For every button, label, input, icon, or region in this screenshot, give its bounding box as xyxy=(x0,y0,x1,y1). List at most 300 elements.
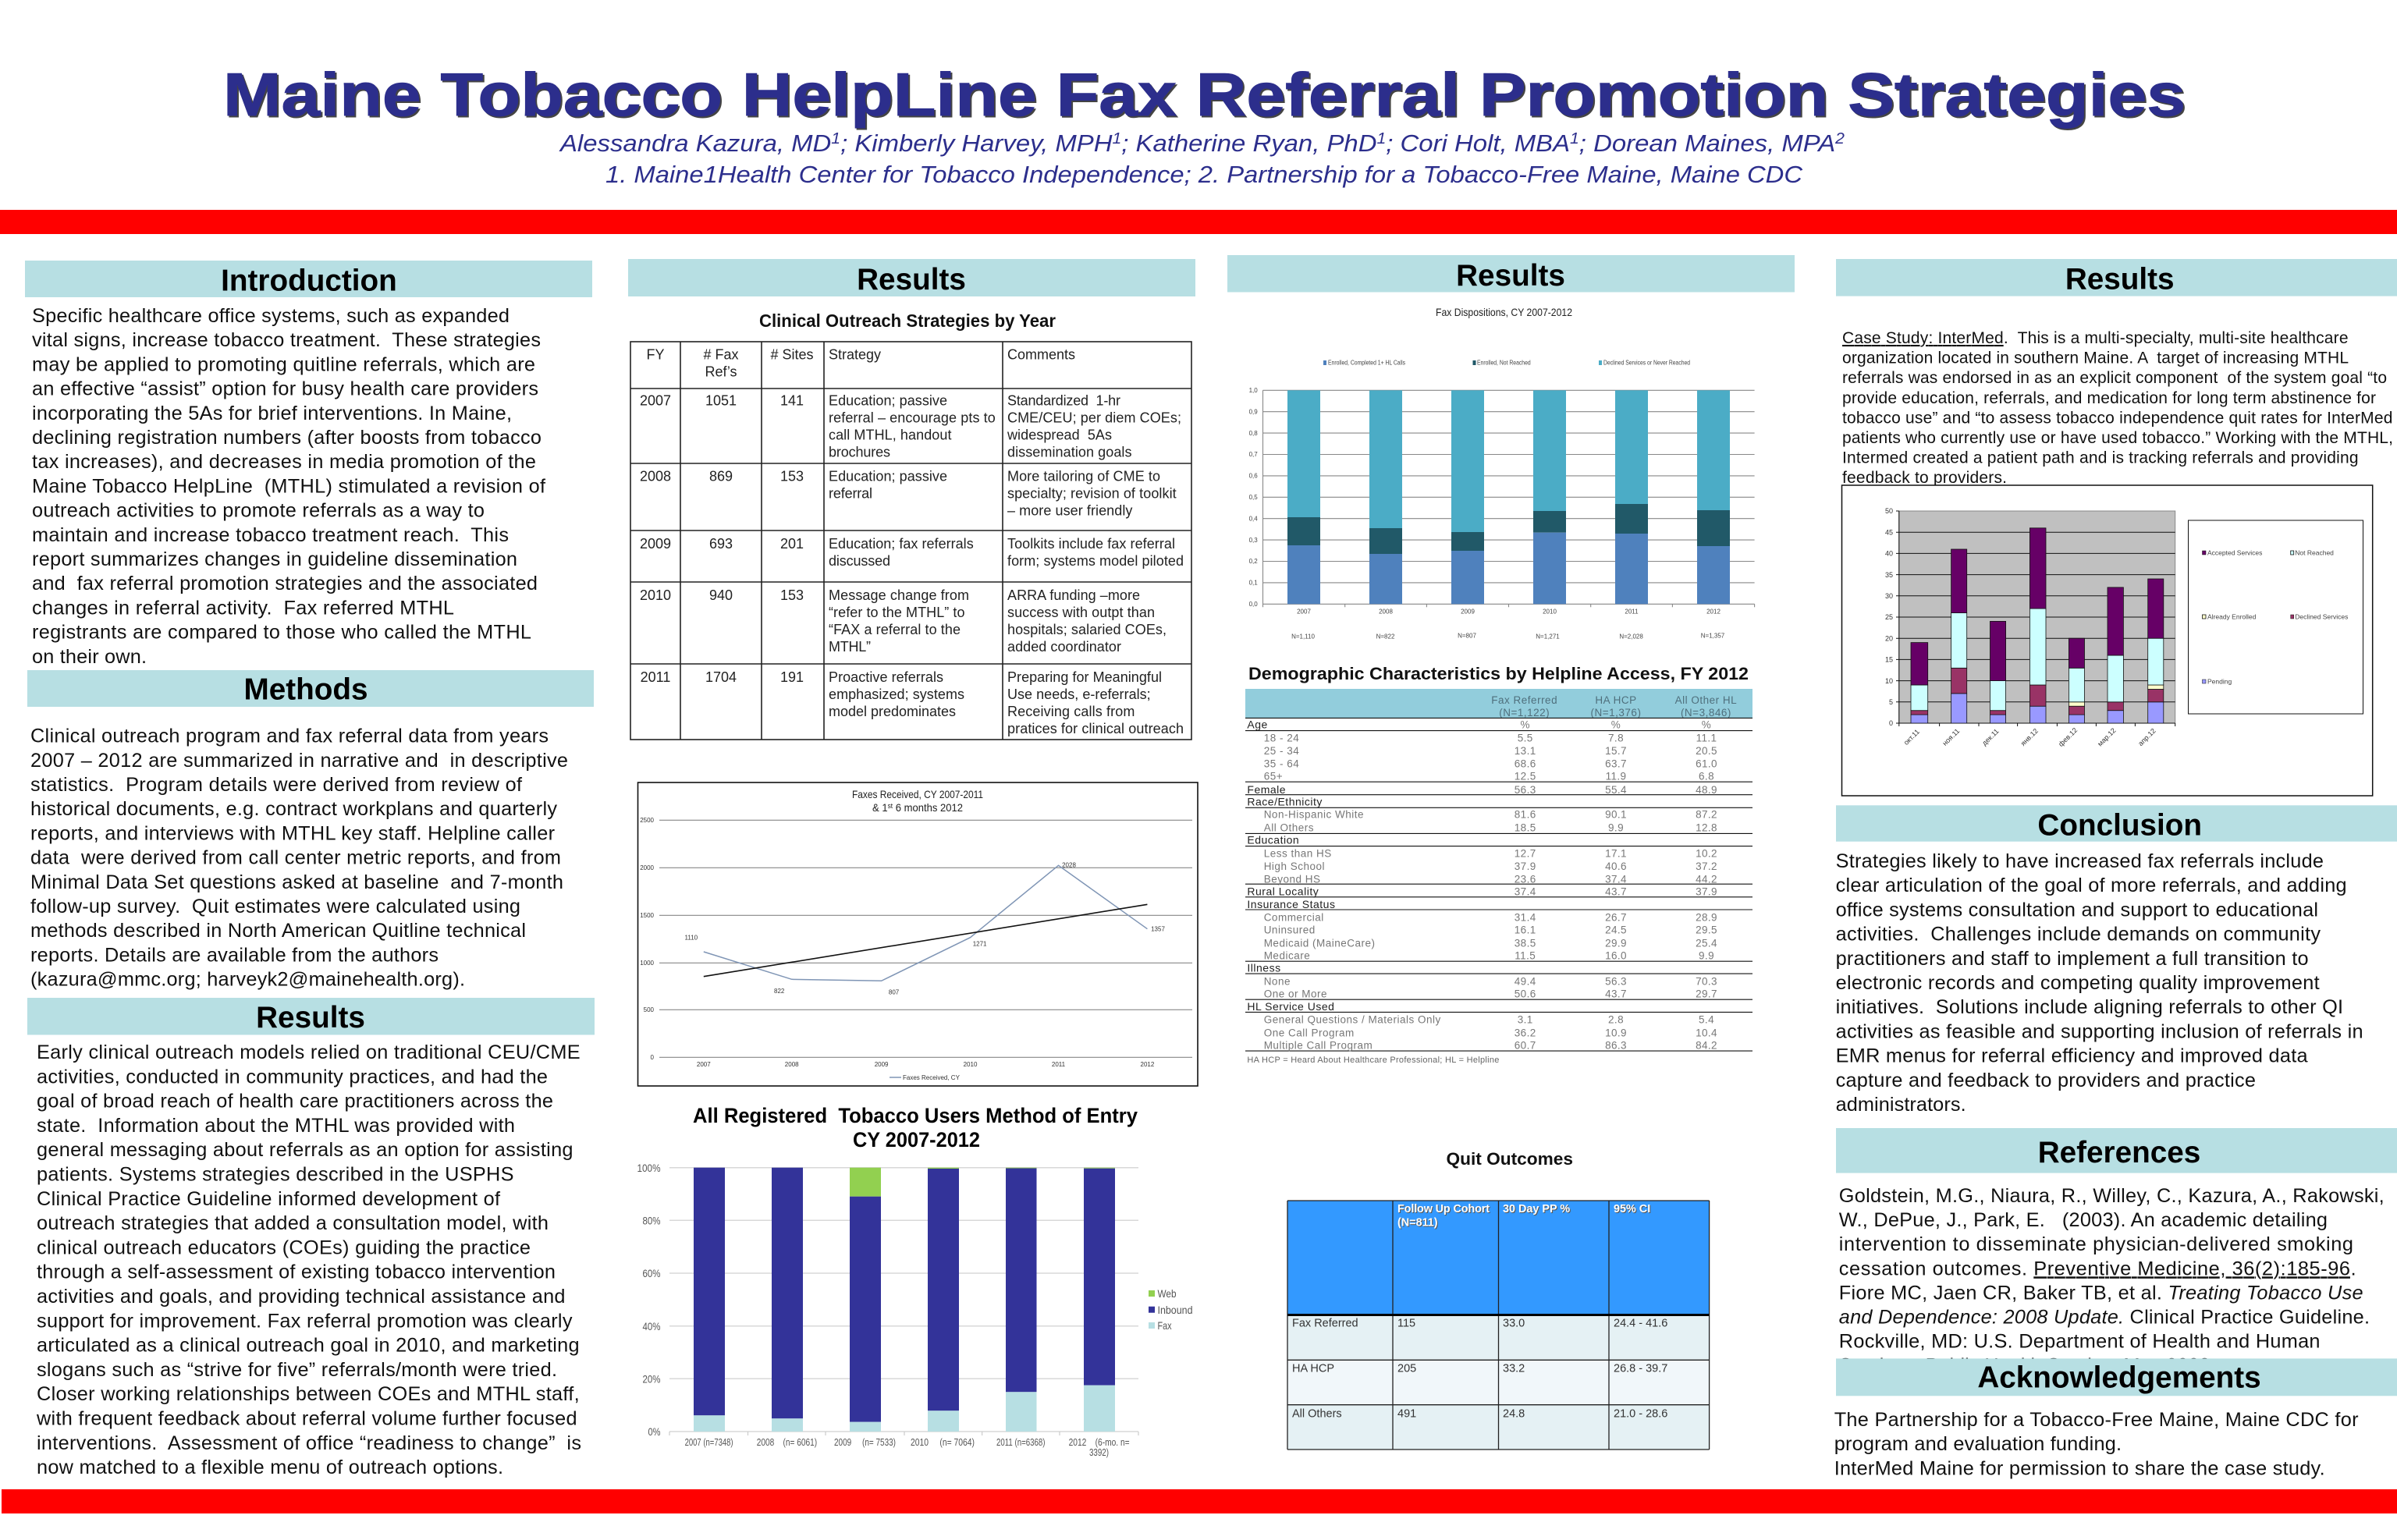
table text: 2008 xyxy=(640,469,671,484)
table values: 37.2 xyxy=(1696,860,1717,872)
heading: results column 1: Results xyxy=(256,1001,365,1034)
table text: 153 xyxy=(780,469,804,484)
authors and affiliations: 1 xyxy=(1376,130,1386,147)
heading: results column 2: Results xyxy=(857,263,966,296)
heading: references xyxy=(1836,1128,2397,1173)
axis labels: 0,5 xyxy=(1249,494,1258,501)
row labels: sub-categories: Non-Hispanic White xyxy=(1264,809,1364,821)
axis labels: 2009 xyxy=(1461,609,1475,615)
table text: More tailoring of CME to xyxy=(1007,469,1160,484)
heading: introduction: Introduction xyxy=(221,264,397,298)
table text: Strategy xyxy=(829,346,881,362)
text: results body: support for improvement. Fax referral promotion was clearly xyxy=(37,1310,573,1332)
table footnote: HA HCP = Heard About Healthcare Professional; HL = Helpline xyxy=(1247,1056,1499,1065)
axis labels xyxy=(1249,387,1725,640)
text: introduction body: on their own. xyxy=(32,646,147,668)
text: conclusion body: clear articulation of the goal of more referrals, and adding xyxy=(1836,875,2347,896)
table header text: Follow Up Cohort xyxy=(1397,1203,1490,1215)
table text: Ref’s xyxy=(705,364,737,379)
data labels: 2028 xyxy=(1062,861,1076,869)
table values: 11.1 xyxy=(1696,733,1717,744)
stacked bar chart: InterMed referrals xyxy=(1841,485,2373,796)
text: introduction body: an effective “assist” option for busy health care providers xyxy=(32,378,538,400)
table values: 9.9 xyxy=(1608,821,1624,833)
y axis labels: 0 xyxy=(651,1054,655,1061)
table values: 16.0 xyxy=(1605,950,1627,962)
table values: 43.7 xyxy=(1605,886,1627,897)
authors and affiliations: Alessandra Kazura, MD xyxy=(560,130,815,157)
text: introduction body: registrants are compared to those who called the MTHL xyxy=(32,622,531,644)
x axis labels: 2010 (n= 7064) xyxy=(911,1437,975,1448)
heading: results column 3: Results xyxy=(1456,259,1565,293)
table row text: 33.2 xyxy=(1503,1363,1525,1375)
row labels: categories: Female xyxy=(1247,783,1286,796)
table values: 18.5 xyxy=(1515,821,1536,833)
row labels: sub-categories: Less than HS xyxy=(1264,848,1332,860)
text: introduction body: changes in referral activity. Fax referred MTHL xyxy=(32,597,454,619)
legend xyxy=(1149,1287,1192,1332)
text: case study InterMed: feedback to providers. xyxy=(1842,469,2007,487)
heading: results column 4 xyxy=(1836,259,2397,296)
text: acknowledgements body xyxy=(1834,1409,2358,1480)
panel: methods xyxy=(27,670,594,991)
panel: acknowledgements xyxy=(1834,1358,2397,1480)
y axis labels: 500 xyxy=(644,1006,655,1013)
text: results body: state. Information about the MTHL was provided with xyxy=(37,1115,515,1137)
row labels: sub-categories: High School xyxy=(1264,860,1325,872)
table values: 68.6 xyxy=(1515,758,1536,769)
fax line series xyxy=(704,865,1147,981)
y axis labels: 40% xyxy=(643,1320,660,1332)
axis labels: 2008 xyxy=(1379,609,1393,615)
stacked bar chart: fax dispositions xyxy=(1249,306,1755,640)
data labels: 1357 xyxy=(1151,925,1165,933)
table text: Toolkits include fax referral xyxy=(1007,536,1175,552)
table values: 43.7 xyxy=(1605,988,1627,999)
text: case study InterMed: Case Study: InterMed. This is a multi-specialty, multi-site healthcare xyxy=(1842,329,2349,347)
table values: 16.1 xyxy=(1515,924,1536,936)
table text: Use needs, e-referrals; xyxy=(1007,687,1151,702)
axis labels: 2011 xyxy=(1625,609,1639,615)
text: methods body: methods described in North American Quitline technical xyxy=(30,920,526,942)
table values: 50.6 xyxy=(1515,988,1536,999)
text: case study InterMed: referrals was endorsed in as an explicit component of the system goal “to xyxy=(1842,369,2387,387)
text: results body: with frequent feedback about referral volume further focused xyxy=(36,1407,577,1429)
table row text: 21.0 - 28.6 xyxy=(1614,1408,1667,1421)
text: introduction body: declining registration numbers (after boosts from tobacco xyxy=(32,427,542,449)
legend: Inbound xyxy=(1158,1304,1192,1316)
text: references body: Rockville, MD: U.S. Department of Health and Human xyxy=(1839,1331,2321,1353)
text: acknowledgements body: InterMed Maine for permission to share the case study. xyxy=(1834,1458,2325,1480)
table row text xyxy=(1292,1318,1667,1421)
table title: Quit Outcomes xyxy=(1447,1149,1573,1169)
text: methods body: follow-up survey. Quit estimates were calculated using xyxy=(30,896,520,917)
authors and affiliations: 1. Maine1Health Center for Tobacco Independence; 2. Partnership for a Tobacco-Free Maine, Maine CDC xyxy=(605,161,1803,188)
text: results body: activities, conducted in community practices, and had the xyxy=(37,1066,548,1088)
text: case study InterMed: organization located in southern Maine. A target of increasing MTHL xyxy=(1842,350,2349,367)
table values: 24.5 xyxy=(1605,924,1627,936)
data labels: 1271 xyxy=(973,941,987,947)
text: acknowledgements body: program and evaluation funding. xyxy=(1834,1433,2122,1455)
table text: 693 xyxy=(709,536,733,552)
row labels: categories: Education xyxy=(1247,834,1299,846)
y axis labels: 15 xyxy=(1885,655,1893,663)
text: methods body: statistics. Program details were derived from review of xyxy=(30,774,523,796)
panel: clinical outreach strategies table xyxy=(630,310,1191,740)
text: references body: Fiore MC, Jaen CR, Baker TB, et al. Treating Tobacco Use xyxy=(1839,1282,2363,1304)
text: introduction body: maintain and increase tobacco treatment reach. This xyxy=(32,524,509,546)
table values: 17.1 xyxy=(1605,848,1627,860)
x axis labels xyxy=(1902,726,2157,748)
text: conclusion body xyxy=(1836,850,2363,1116)
table values: 23.6 xyxy=(1515,874,1536,885)
text: results body: now matched to a flexible menu of outreach options. xyxy=(37,1457,503,1478)
axis labels: 0,7 xyxy=(1249,451,1258,458)
table row text: HA HCP xyxy=(1292,1363,1334,1375)
y axis labels: 30 xyxy=(1885,592,1893,600)
table values: 63.7 xyxy=(1605,758,1627,769)
table text: Preparing for Meaningful xyxy=(1007,669,1162,685)
table text: Education; fax referrals xyxy=(829,536,974,552)
axis labels: 0,6 xyxy=(1249,473,1258,479)
heading: results column 4: Results xyxy=(2065,262,2175,296)
row labels: sub-categories: 18 - 24 xyxy=(1264,733,1299,744)
text: case study InterMed: Intermed created a patient path and is tracking referrals and providing xyxy=(1842,449,2358,467)
table text: # Fax xyxy=(703,346,739,362)
text: results body: through a self-assessment of existing tobacco intervention xyxy=(37,1261,556,1283)
panel: introduction xyxy=(25,261,592,668)
title: Maine Tobacco HelpLine Fax Referral Promotion Strategies xyxy=(223,60,2186,129)
y axis labels: 40 xyxy=(1885,549,1893,557)
table values: 48.9 xyxy=(1696,784,1717,796)
table values: 70.3 xyxy=(1696,975,1717,987)
table text: dissemination goals xyxy=(1007,445,1131,460)
x axis labels xyxy=(685,1437,1130,1458)
text: conclusion body: initiatives. Solutions include aligning referrals to other QI xyxy=(1836,996,2343,1018)
text: results body: activities and goals, and providing technical assistance and xyxy=(37,1286,565,1308)
table values: 81.6 xyxy=(1515,809,1536,821)
legend: Accepted Services xyxy=(2207,549,2262,557)
data labels: 2007 xyxy=(697,1061,711,1068)
text: references body: W., DePue, J., Park, E. (2003). An academic detailing xyxy=(1839,1209,2328,1231)
row labels: sub-categories: Medicaid (MaineCare) xyxy=(1264,937,1376,949)
table row text: 115 xyxy=(1397,1318,1415,1330)
table values: 36.2 xyxy=(1515,1027,1536,1038)
table text: hospitals; salaried COEs, xyxy=(1007,622,1167,637)
text: conclusion body: activities. Challenges include demands on community xyxy=(1836,924,2321,946)
table text: 940 xyxy=(709,587,733,603)
heading: introduction xyxy=(25,261,592,298)
table values: 56.3 xyxy=(1605,975,1627,987)
row labels: sub-categories: One or More xyxy=(1264,988,1327,999)
table text: form; systems model piloted xyxy=(1007,553,1184,569)
table values: 40.6 xyxy=(1605,860,1627,872)
table header: (N=3,846) xyxy=(1681,707,1731,719)
row labels: sub-categories: Uninsured xyxy=(1264,924,1316,936)
axis labels: 0,1 xyxy=(1249,579,1258,587)
text: introduction body: tax increases), and decreases in media promotion of the xyxy=(32,451,536,473)
row labels: categories: Age xyxy=(1247,719,1268,731)
table row text: 491 xyxy=(1397,1408,1416,1421)
table header text: 30 Day PP % xyxy=(1503,1203,1570,1215)
panel: results narrative xyxy=(27,998,595,1478)
table values: 12.7 xyxy=(1515,848,1536,860)
table values: 3.1 xyxy=(1518,1013,1533,1025)
text: methods body: data were derived from call center metric reports, and from xyxy=(30,847,561,869)
row labels: sub-categories: All Others xyxy=(1264,821,1314,833)
table text: pratices for clinical outreach xyxy=(1007,721,1184,736)
table values: % xyxy=(1611,719,1621,731)
table text: Receiving calls from xyxy=(1007,704,1135,719)
legend: Enrolled, Not Reached xyxy=(1477,359,1531,367)
table values: 15.7 xyxy=(1605,745,1627,757)
authors and affiliations: 1 xyxy=(831,130,840,147)
legend xyxy=(1323,359,1690,367)
table grid xyxy=(630,342,1191,740)
heading: acknowledgements: Acknowledgements xyxy=(1977,1361,2261,1394)
axis labels: N=1,110 xyxy=(1291,633,1315,640)
table text: referral xyxy=(829,486,872,502)
text: conclusion body: EMR menus for referral efficiency and improved data xyxy=(1836,1045,2309,1067)
table text: 153 xyxy=(780,587,804,603)
legend: Enrolled, Completed 1+ HL Calls xyxy=(1328,359,1405,367)
text: conclusion body: administrators. xyxy=(1836,1094,1966,1116)
legend xyxy=(2188,520,2363,714)
text: introduction body: report summarizes changes in guideline dissemination xyxy=(32,548,517,570)
table row text: 205 xyxy=(1397,1363,1416,1375)
text: introduction body: vital signs, increase tobacco treatment. These strategies xyxy=(32,329,541,351)
text: introduction body xyxy=(32,305,546,668)
y axis labels xyxy=(637,1162,660,1438)
y axis labels: 20 xyxy=(1885,635,1893,643)
x axis labels: 2009 (n= 7533) xyxy=(834,1437,896,1448)
authors and affiliations: 1 xyxy=(1112,130,1121,147)
top red bar xyxy=(0,210,2397,234)
authors and affiliations: ; Cori Holt, MBA xyxy=(1386,130,1570,157)
table header text: 95% CI xyxy=(1614,1203,1650,1215)
table header xyxy=(1245,689,1752,719)
table text: added coordinator xyxy=(1007,639,1121,655)
heading: methods: Methods xyxy=(243,672,368,707)
text: methods body: 2007 – 2012 are summarized in narrative and in descriptive xyxy=(30,750,568,772)
table text: 1051 xyxy=(705,393,737,409)
table row text: 33.0 xyxy=(1503,1318,1525,1330)
table text: success with outpt than xyxy=(1007,605,1155,620)
table text: 191 xyxy=(780,669,804,685)
legend: Web xyxy=(1158,1287,1177,1300)
table text: widespread 5As xyxy=(1007,428,1112,443)
y axis labels xyxy=(1885,507,1893,727)
text: methods body: (kazura@mmc.org; harveyk2@mainehealth.org). xyxy=(30,969,465,991)
axis labels: 2007 xyxy=(1297,609,1311,615)
row labels: categories: Rural Locality xyxy=(1247,885,1319,897)
table title: Demographic Characteristics by Helpline Access, FY 2012 xyxy=(1248,664,1749,683)
panel: conclusion xyxy=(1836,805,2397,1116)
line chart: faxes received xyxy=(638,782,1198,1086)
text: results body: Clinical Practice Guideline informed development of xyxy=(37,1188,501,1210)
table text: 1704 xyxy=(705,669,737,685)
text: results body xyxy=(36,1041,581,1478)
row labels: sub-categories: 25 - 34 xyxy=(1264,745,1299,757)
data labels: 807 xyxy=(889,989,900,995)
text: conclusion body: office systems consultation and support to educational xyxy=(1836,899,2318,921)
table values: 87.2 xyxy=(1696,809,1717,821)
text: conclusion body: practitioners and staff to implement a full transition to xyxy=(1836,948,2309,970)
text: case study InterMed: provide education, referrals, and medication for long term abstinence for xyxy=(1842,389,2376,407)
table values: 37.4 xyxy=(1605,874,1627,885)
table values: % xyxy=(1520,719,1530,731)
text: methods body: reports. Details are available from the authors xyxy=(30,944,439,966)
text: case study InterMed: patients who currently use or have used tobacco.” Working with the MTHL, xyxy=(1842,429,2393,447)
row labels: sub-categories: 35 - 64 xyxy=(1264,758,1299,769)
table values: 10.2 xyxy=(1696,848,1717,860)
table values: 90.1 xyxy=(1605,809,1627,821)
table values: 56.3 xyxy=(1515,784,1536,796)
table text: discussed xyxy=(829,553,890,569)
table row text: All Others xyxy=(1292,1408,1342,1421)
axis labels: 0,9 xyxy=(1249,409,1258,415)
y axis labels: 60% xyxy=(643,1267,660,1279)
text: results body: patients. Systems strategies described in the USPHS xyxy=(37,1164,513,1186)
x axis labels: янв.12 xyxy=(2019,727,2040,747)
data labels: 2012 xyxy=(1141,1061,1155,1068)
heading: results column 3 xyxy=(1227,255,1795,293)
table text: # Sites xyxy=(770,346,814,362)
data labels: 2011 xyxy=(1052,1061,1066,1068)
chart title xyxy=(693,1104,1138,1151)
row labels: sub-categories: None xyxy=(1264,975,1291,987)
y axis labels: 80% xyxy=(643,1214,660,1226)
text: introduction body: Specific healthcare office systems, such as expanded xyxy=(32,305,510,327)
authors and affiliations: ; Kimberly Harvey, MPH xyxy=(840,130,1113,157)
table header: Fax Referred xyxy=(1491,694,1557,706)
table row text: 24.8 xyxy=(1503,1408,1525,1421)
heading: results column 2 xyxy=(628,259,1195,296)
text: methods body: reports, and interviews with MTHL key staff. Helpline caller xyxy=(30,822,555,844)
y axis labels: 5 xyxy=(1889,698,1893,706)
y axis labels: 1000 xyxy=(640,960,655,967)
table values: 29.7 xyxy=(1696,988,1717,999)
data labels xyxy=(684,861,1165,1068)
y axis labels: 2500 xyxy=(640,817,655,824)
text: methods body: historical documents, e.g. contract workplans and quarterly xyxy=(30,798,557,820)
text: acknowledgements body: The Partnership for a Tobacco-Free Maine, Maine CDC for xyxy=(1834,1409,2358,1431)
chart title: Fax Dispositions, CY 2007-2012 xyxy=(1436,306,1572,318)
row labels: categories: Illness xyxy=(1247,961,1281,974)
text: case study InterMed xyxy=(1842,329,2393,487)
table title: Clinical Outreach Strategies by Year xyxy=(759,310,1056,331)
x axis labels: фев.12 xyxy=(2057,726,2079,748)
row labels: sub-categories: Commercial xyxy=(1264,912,1324,924)
text: results body: slogans such as “strive for five” referrals/month were tried. xyxy=(37,1359,557,1381)
text: introduction body: Maine Tobacco HelpLine (MTHL) stimulated a revision of xyxy=(32,475,546,497)
table values: 6.8 xyxy=(1699,771,1714,782)
y axis labels: 35 xyxy=(1885,571,1893,579)
text: references body: cessation outcomes. Preventive Medicine, 36(2):185-96. xyxy=(1839,1258,2356,1279)
x axis labels: 2007 (n=7348) xyxy=(685,1437,733,1448)
row labels: sub-categories: Medicare xyxy=(1264,950,1310,962)
table values: 11.5 xyxy=(1515,950,1536,962)
table text: specialty; revision of toolkit xyxy=(1007,486,1177,502)
x axis labels: окт.11 xyxy=(1902,728,1921,747)
table values: 7.8 xyxy=(1608,733,1624,744)
table text: 141 xyxy=(780,393,804,409)
text: results body: goal of broad reach of health care practitioners across the xyxy=(37,1091,553,1112)
table text: brochures xyxy=(829,445,890,460)
chart title: & 1 xyxy=(872,801,889,814)
table values: 37.9 xyxy=(1515,860,1536,872)
stacked bar chart: method of entry xyxy=(637,1104,1192,1458)
axis labels: N=1,271 xyxy=(1536,633,1560,640)
table text: “FAX a referral to the xyxy=(829,622,961,637)
bottom red bar xyxy=(2,1489,2397,1513)
table row text: 24.4 - 41.6 xyxy=(1614,1318,1667,1330)
heading: acknowledgements xyxy=(1836,1358,2397,1396)
chart title: 6 months 2012 xyxy=(893,801,963,814)
text: references body: and Dependence: 2008 Update. Clinical Practice Guideline. xyxy=(1839,1306,2370,1328)
legend: Declined Services xyxy=(2295,613,2348,621)
table values: 29.5 xyxy=(1696,924,1717,936)
heading: conclusion: Conclusion xyxy=(2037,809,2202,843)
table text: 201 xyxy=(780,536,804,552)
y axis labels: 1500 xyxy=(640,912,655,919)
table text: Message change from xyxy=(829,587,969,603)
text: results body: interventions. Assessment of office “readiness to change” is xyxy=(37,1432,581,1454)
table text: ARRA funding –more xyxy=(1007,587,1140,603)
x axis labels: 2011 (n=6368) xyxy=(996,1437,1046,1448)
text: conclusion body: electronic records and competing quality improvement xyxy=(1836,972,2320,994)
x axis labels: 2008 (n= 6061) xyxy=(757,1437,817,1448)
table text: 2007 xyxy=(640,393,671,409)
data labels: 2008 xyxy=(785,1061,799,1068)
y axis labels: 100% xyxy=(637,1162,660,1174)
y axis labels: 50 xyxy=(1885,507,1893,515)
text: introduction body: outreach activities to promote referrals as a way to xyxy=(32,500,485,522)
table text: FY xyxy=(646,346,665,362)
table values: 37.9 xyxy=(1696,886,1717,897)
text: results body: Early clinical outreach models relied on traditional CEU/CME xyxy=(37,1041,581,1063)
text: methods body xyxy=(30,726,568,991)
axis labels: N=2,028 xyxy=(1619,633,1643,640)
heading: methods xyxy=(27,670,594,707)
row labels: sub-categories: 65+ xyxy=(1264,771,1283,782)
panel: references xyxy=(1836,1128,2397,1377)
table values: 28.9 xyxy=(1696,912,1717,924)
panel: demographic characteristics table xyxy=(1245,664,1752,1065)
x axis labels: 3392) xyxy=(1089,1447,1109,1458)
data labels: 2010 xyxy=(964,1061,978,1068)
y axis labels xyxy=(640,817,655,1061)
table text: Standardized 1-hr xyxy=(1007,393,1120,409)
table header: HA HCP xyxy=(1595,694,1637,706)
table values: 86.3 xyxy=(1605,1039,1627,1052)
row labels: categories xyxy=(1247,719,1335,1013)
table values: 55.4 xyxy=(1605,784,1627,796)
text: references body xyxy=(1839,1185,2385,1377)
table row text: Fax Referred xyxy=(1292,1318,1358,1330)
authors and affiliations: 2 xyxy=(1834,130,1845,147)
table values: 2.8 xyxy=(1608,1013,1624,1025)
heading: results column 1 xyxy=(27,998,595,1034)
table values: 25.4 xyxy=(1696,937,1717,949)
chart title: CY 2007-2012 xyxy=(853,1128,980,1151)
table text: referral – encourage pts to xyxy=(829,410,996,426)
x axis labels: 2012 (6-mo. n= xyxy=(1069,1437,1130,1448)
data labels: 2009 xyxy=(875,1061,889,1068)
text: results body: clinical outreach educators (COEs) guiding the practice xyxy=(37,1237,531,1258)
x axis labels: ноя.11 xyxy=(1941,727,1961,747)
text: conclusion body: Strategies likely to have increased fax referrals include xyxy=(1836,850,2324,872)
